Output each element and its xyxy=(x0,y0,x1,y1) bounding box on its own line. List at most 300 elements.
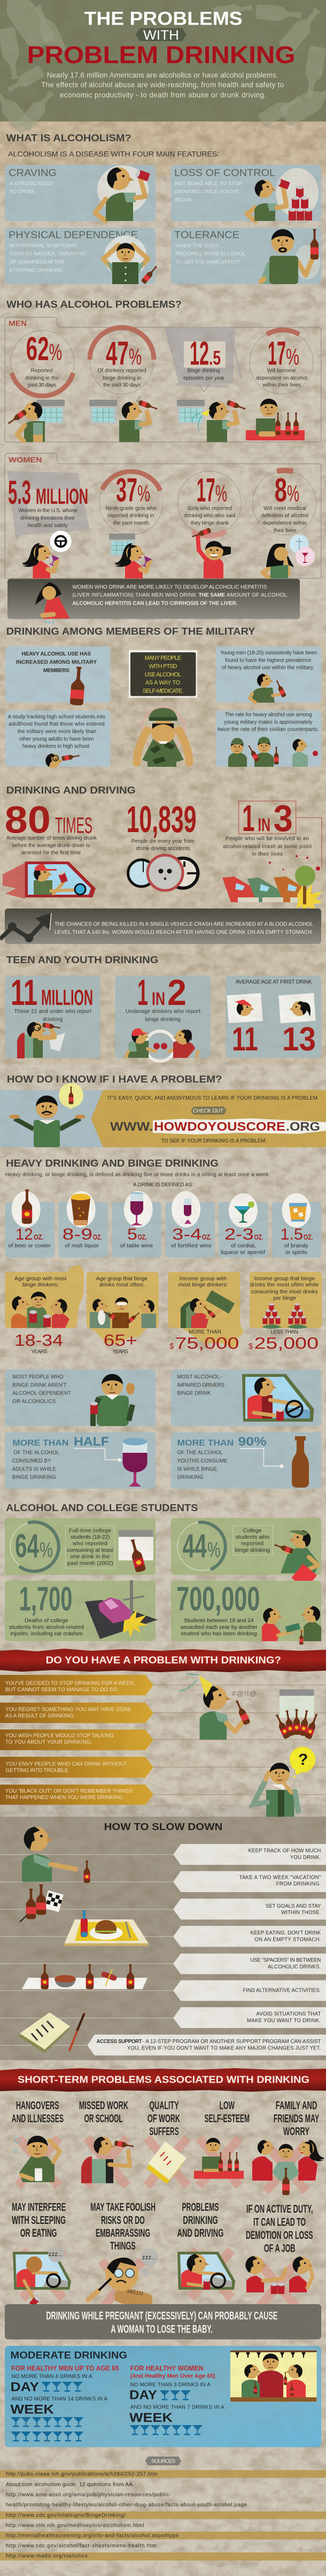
panel: more than 90% xyxy=(171,1432,321,1489)
sign 1: BUT CANNOT SEEM TO MANAGE TO DO SO. xyxy=(5,1687,119,1693)
icon: woman thinking of driving xyxy=(21,531,72,578)
stat: 17% girls: drinking who also said xyxy=(184,513,235,519)
stat: 37%: Ninth-grade girls who xyxy=(106,506,157,512)
icon: worried man xyxy=(253,1747,315,1817)
column: men: FOR HEALTHY MEN UP TO AGE 65 xyxy=(11,2365,119,2372)
column: men xyxy=(11,2365,119,2441)
panel: malt liquor xyxy=(58,1191,108,1257)
panel: loss of control: BEGUN xyxy=(175,197,191,203)
problem: interfere with sleeping: MAY INTERFERE xyxy=(12,2201,66,2213)
panel: physical dependence xyxy=(5,228,159,284)
callout: ptsd xyxy=(129,650,197,698)
text: AMOUNT OF ALCOHOL. xyxy=(227,592,289,598)
panel: 64% college xyxy=(5,1518,156,1575)
text: TO SEE IF YOUR DRINKING IS A PROBLEM. xyxy=(161,1138,267,1144)
icon: wine glass xyxy=(130,1192,143,1225)
panel: income binge most often: Income group that binge xyxy=(254,1276,315,1282)
panel: 700,000 assaulted: student who has been drinking xyxy=(181,1631,257,1637)
panel: 44% college: binge drinking xyxy=(235,1548,270,1553)
panel: not alcohol-dependent: OR ALCOHOLICS xyxy=(12,1399,56,1405)
subheading: four features: ALCOHOLISM IS A DISEASE WITH FOUR MAIN FEATURES: xyxy=(8,150,219,158)
column: women: DAY xyxy=(129,2388,157,2402)
stat: 5.3 million: health and safety xyxy=(28,523,68,529)
panel: young men: found to have the highest prevalence xyxy=(225,658,312,664)
definition text: Heavy drinking, or binge drinking, is defined as drinking five or more drinks in a sitting at least once a week. xyxy=(5,1172,270,1178)
panel: 64% college: who reported xyxy=(72,1541,107,1547)
panel: table wine: OZ. xyxy=(138,1233,147,1241)
stat: 80 times: before the average drunk driver is xyxy=(12,843,90,849)
panel: beer: 12 xyxy=(15,1226,33,1244)
problem: interfere with sleeping xyxy=(12,2201,71,2307)
panel: men: MEN xyxy=(9,319,27,327)
icon: pint glass xyxy=(71,1194,90,1225)
icon: martini xyxy=(234,1201,254,1223)
stat: 1 in 3: People who will be involved in an xyxy=(226,836,309,842)
panel: rate among males: The rate for heavy alcohol use among xyxy=(225,712,312,718)
panel: 700,000 assaulted xyxy=(171,1580,321,1645)
panel: age group most binge drinkers: 18-34 xyxy=(14,1331,63,1350)
icon: soldier covering ears xyxy=(137,707,189,767)
list: source links: http://pubs.niaaa.nih.gov/publications/arh284/252-257.htm xyxy=(6,2472,157,2478)
stat: 12.5 binge episodes xyxy=(165,326,242,392)
problem: family worry xyxy=(252,2099,325,2195)
panel: income binge most often: 25,000 xyxy=(254,1334,319,1353)
tip 4: ON AN EMPTY STOMACH. xyxy=(254,1937,321,1942)
stat: 5.3 million xyxy=(7,471,90,540)
column: men: AND NO MORE THAN 14 DRINKS IN A xyxy=(11,2396,107,2402)
banner: do you have a problem: DO YOU HAVE A PROBLEM WITH DRINKING? xyxy=(46,1654,281,1665)
panel: impaired drivers: IMPAIRED DRIVERS xyxy=(177,1382,224,1388)
icon: man with money xyxy=(181,1290,235,1328)
icon: rising arrow xyxy=(0,912,52,942)
banner: do you have a problem xyxy=(0,1649,326,1672)
icon: man refusing bottle xyxy=(22,1827,90,1883)
text: (LIVER INFLAMMATION) THAN MEN WHO DRINK xyxy=(72,592,197,598)
panel: more than half: HALF xyxy=(74,1435,109,1449)
stat: 1 in 3: in their lives xyxy=(252,851,283,857)
panel: tolerance: REQUIRES MORE ALCOHOL xyxy=(175,251,246,257)
column: women: NO MORE THAN 3 DRINKS IN A xyxy=(130,2382,211,2388)
panel: 1,700 deaths: Deaths of college xyxy=(25,1618,68,1624)
icon: man with calendar xyxy=(7,400,65,442)
icon: sweating man xyxy=(103,235,159,284)
panel: malt liquor: 8-9 xyxy=(63,1226,92,1244)
panel: income most binge drinkers xyxy=(168,1272,244,1353)
stat: 62%: 62 xyxy=(26,331,49,368)
stat: 1 in 3: 3 xyxy=(274,797,293,839)
panel: 64% college: consuming at least xyxy=(67,1548,113,1553)
stat: 62% xyxy=(11,331,74,396)
panel: craving: CRAVING xyxy=(9,167,57,178)
panel: spirits xyxy=(271,1193,321,1257)
panel: age group binge most often: 65+ xyxy=(104,1331,137,1350)
panel: income most binge drinkers: MORE THAN xyxy=(189,1329,221,1335)
panel: women xyxy=(5,453,321,578)
panel: more than half: OF THE ALCOHOL xyxy=(13,1450,60,1456)
problem: hangovers: AND ILLNESSES xyxy=(12,2113,64,2125)
panel: fortified wine xyxy=(165,1191,215,1257)
problem: drinking and driving: PROBLEMS xyxy=(182,2201,219,2213)
icon: girl head tile xyxy=(278,993,316,1023)
panel: spirits: OZ. xyxy=(304,1233,313,1241)
panel: young men: of heavy alcohol use within the military. xyxy=(222,665,314,671)
panel: tolerance: TO GET THE SAME EFFECT xyxy=(175,260,241,265)
list: source links: http://www.cdc.gov/alcohol/fact-sheets/mens-health.htm xyxy=(6,2543,157,2549)
panel: 700,000 assaulted: 700,000 xyxy=(176,1580,260,1618)
panel: not alcohol-dependent: ALCOHOL-DEPENDENT xyxy=(12,1391,71,1397)
stat: 10,839 xyxy=(127,798,198,890)
list: source links: http://www.nlm.nih.gov/medlineplus/alcoholism.html xyxy=(6,2522,144,2528)
panel: age group most binge drinkers: binge drinkers: xyxy=(22,1282,59,1288)
stat: 8%: definition of alcohol xyxy=(261,513,308,519)
stat: 80 times xyxy=(3,799,97,899)
problem: foolish risks: THINGS xyxy=(110,2240,136,2252)
chart: 44 ring: 44 xyxy=(183,1528,207,1565)
problem: low self-esteem xyxy=(194,2099,250,2186)
stat: 62%: past 30 days xyxy=(28,383,56,388)
problem: drinking and driving: DRINKING xyxy=(183,2214,218,2227)
panel: income most binge drinkers: $ xyxy=(169,1342,174,1351)
stat: 37%: 37 xyxy=(116,472,137,509)
tip 6: FIND ALTERNATIVE ACTIVITIES. xyxy=(243,1988,321,1994)
icon: woman raising bottle xyxy=(191,528,231,578)
panel: 44% college xyxy=(171,1518,321,1589)
icon: party man with bottle and calendar xyxy=(179,1674,320,1740)
panel: impaired drivers: BINGE DRINK xyxy=(177,1391,211,1397)
column: men: NO MORE THAN 4 DRINKS IN A xyxy=(11,2374,92,2380)
heading: drinking and driving: DRINKING AND DRIVING xyxy=(6,784,136,796)
panel: income most binge drinkers: most binge drinkers: xyxy=(178,1282,228,1288)
list: source links: http://mentalhealthscreening.org/info-and-facts/alcohol.aspx#type xyxy=(6,2533,178,2539)
tip 5: ALCOHOLIC DRINKS. xyxy=(268,1964,321,1970)
list: source links: http://www.cdc.gov/vitalsigns/BingeDrinking/ xyxy=(6,2512,126,2518)
panel: fortified wine: 3-4 xyxy=(172,1226,201,1244)
stat: 47%: % xyxy=(129,345,142,370)
problem: interfere with sleeping: WITH SLEEPING xyxy=(12,2214,66,2227)
icon: man drinking xyxy=(95,165,150,221)
panel: 1,700 deaths: injuries, including car crashes xyxy=(11,1631,82,1637)
title: THE PROBLEMS xyxy=(84,9,243,29)
icon: man with bottle xyxy=(259,229,320,284)
panel: 11 million: Those 21 and under who report xyxy=(14,1009,91,1015)
panel: average age: AVERAGE AGE AT FIRST DRINK xyxy=(236,979,312,985)
icon: shrugging man xyxy=(9,1083,86,1147)
problem: missed work xyxy=(79,2099,134,2186)
sign 1: YOU'VE DECIDED TO STOP DRINKING FOR A WEEK, xyxy=(5,1680,135,1686)
tip 2: TAKE A TWO WEEK "VACATION" xyxy=(239,1875,321,1881)
stat: 10,839: People die every year from xyxy=(131,839,195,844)
tip 4: KEEP EATING. DON'T DRINK xyxy=(250,1930,321,1936)
panel: 44% college: students who xyxy=(236,1534,269,1540)
problem: foolish risks: MAY TAKE FOOLISH xyxy=(90,2201,156,2213)
callout: ptsd: SELF-MEDICATE. xyxy=(143,688,183,695)
panel: more than half xyxy=(5,1432,156,1489)
panel: cordial: 2-3 xyxy=(224,1226,254,1244)
column: women: (And Healthy Men Over Age 65) xyxy=(130,2373,215,2379)
sign 1 xyxy=(0,1675,153,1695)
panel: 44% college: reported xyxy=(241,1541,263,1547)
icon: student drinking xyxy=(81,2137,134,2186)
stat: 17%: Will become xyxy=(267,368,296,374)
stat: 5.3 million: MILLION xyxy=(36,484,88,509)
icon: student with book xyxy=(274,1530,319,1589)
callout: pregnancy banner: A WOMAN TO LOSE THE BABY. xyxy=(111,2323,213,2335)
panel: 700,000 assaulted: Students between 18 and 24 xyxy=(184,1618,254,1624)
panel: cordial: liqueur or aperitif xyxy=(221,1249,265,1255)
tip 6 xyxy=(173,1980,326,2001)
stat: 17% girls: they binge drank xyxy=(191,521,229,527)
tip 8: access support: ACCESS SUPPORT xyxy=(96,2039,142,2045)
stat: 10,839: drunk driving accidents xyxy=(136,846,190,852)
stat: 62%: Reported xyxy=(31,368,52,374)
label: check out xyxy=(191,1107,227,1115)
tip 3 xyxy=(173,1899,326,1919)
sign 5 xyxy=(0,1785,153,1805)
sign 4 xyxy=(0,1757,153,1778)
stat: 47%: 47 xyxy=(106,336,129,372)
problem: active duty xyxy=(245,2203,313,2309)
panel: physical dependence: STOPPING DRINKING xyxy=(9,268,63,273)
panel: income binge most often xyxy=(249,1272,322,1353)
icon: sleeping driver: ZZZ... xyxy=(49,2252,63,2257)
panel: income binge most often: $ xyxy=(249,1342,253,1351)
stat: 17%: within their lives xyxy=(262,383,301,388)
list: source links: http://www.madd.org/statistics xyxy=(6,2553,88,2559)
stat: 12.5 binge episodes: Binge drinking xyxy=(187,368,220,374)
icon: driver with can xyxy=(177,2250,235,2298)
stat: 37%: the past month xyxy=(113,521,149,527)
stat: 1 in 3: 1 xyxy=(242,797,255,839)
intro text: economic productivity - to death from abuse or drunk driving. xyxy=(60,91,266,99)
panel: not alcohol-dependent xyxy=(5,1369,156,1426)
stat: 37% xyxy=(99,471,163,535)
panel: high school study: other young adults to have been xyxy=(19,736,94,742)
panel: more than 90%: OF THE ALCOHOL xyxy=(177,1450,223,1456)
problem: low self-esteem: LOW xyxy=(219,2099,235,2112)
text xyxy=(72,584,289,606)
panel: table wine: of table wine xyxy=(120,1243,153,1249)
heading: HOW TO SLOW DOWN xyxy=(104,1821,222,1832)
icon: family around drinker xyxy=(252,2140,325,2195)
tip 1 xyxy=(173,1844,326,1865)
panel: age group most binge drinkers: YEARS xyxy=(31,1349,48,1355)
sign 2: YOU REGRET SOMETHING YOU MAY HAVE DONE xyxy=(5,1706,131,1712)
icon: woman deciding xyxy=(263,535,315,578)
callout: ptsd: MANY PEOPLE xyxy=(145,655,181,661)
sign 3: TO YOU ABOUT YOUR DRINKING. xyxy=(5,1740,92,1746)
panel: impaired drivers: MOST ALCOHOL- xyxy=(177,1374,222,1380)
icon: can pyramids xyxy=(262,1303,308,1329)
stat: 8% xyxy=(252,470,316,535)
callout: ptsd: USE ALCOHOL xyxy=(145,672,181,678)
panel: average age: 11 xyxy=(232,1021,258,1058)
panel: tolerance: TOLERANCE xyxy=(174,229,239,240)
sign 4: GETTING INTO TROUBLE. xyxy=(5,1768,69,1774)
panel: income binge most often: per binge xyxy=(273,1295,296,1301)
panel: age group binge most often: Age group that binge xyxy=(96,1276,148,1282)
problem: interfere with sleeping: OR EATING xyxy=(20,2227,57,2239)
banner: short-term problems: SHORT-TERM PROBLEMS ASSOCIATED WITH DRINKING xyxy=(18,2074,309,2085)
panel: young men xyxy=(216,646,321,703)
panel: spirits: of brandy xyxy=(284,1243,308,1249)
panel: more than half: CONSUMED BY xyxy=(12,1458,51,1464)
panel: beer: of beer or cooler xyxy=(9,1243,51,1249)
panel: 64% college: one drink in the xyxy=(71,1554,110,1560)
title: WITH xyxy=(143,28,179,43)
panel: heavy alcohol use: HEAVY ALCOHOL USE HAS xyxy=(21,651,91,657)
tip 2 xyxy=(173,1871,326,1892)
stat: 17% girls xyxy=(177,471,242,536)
icon: man with cans xyxy=(247,168,319,221)
panel: malt liquor: OZ. xyxy=(93,1233,102,1241)
problem: low self-esteem: SELF-ESTEEM xyxy=(204,2113,250,2125)
list: source links: http://www.ama-assn.org/ama/pub/physician-resources/public- xyxy=(6,2492,171,2498)
intro text: The effects of alcohol abuse are wide-reaching, from health and safety to xyxy=(41,81,284,89)
stat: 12.5 binge episodes: episodes per year xyxy=(183,375,225,381)
icon: three older men xyxy=(90,1297,156,1328)
problem: quality of work: OF WORK xyxy=(148,2113,180,2125)
intro text xyxy=(41,71,284,99)
tip 4 xyxy=(173,1926,326,1947)
problem: drinking and driving: AND DRIVING xyxy=(177,2227,223,2239)
callout: hepatitis banner xyxy=(7,579,300,624)
callout: ptsd: WITH PTSD xyxy=(149,664,177,670)
icon: meal tray xyxy=(65,1910,149,1946)
panel: 64% college: Full-time college xyxy=(69,1528,111,1534)
icon: man drinking with calendar xyxy=(89,397,158,442)
panel: fortified wine: of fortified wine xyxy=(171,1243,212,1249)
problem: quality of work: SUFFERS xyxy=(149,2125,179,2138)
text: WOMEN WHO DRINK ARE MORE LIKELY TO DEVELOP ALCOHOLIC HEPATITIS xyxy=(72,584,267,590)
tip 1: YOU DRINK. xyxy=(290,1855,321,1861)
intro text: Nearly 17.6 million Americans are alcoholics or have alcohol problems. xyxy=(47,71,278,79)
problem: foolish risks: RISKS OR DO xyxy=(101,2214,145,2227)
stat: 80 times: TIMES xyxy=(55,813,92,838)
problem: drinking and driving xyxy=(177,2201,235,2298)
panel: men xyxy=(5,317,321,442)
tip 5 xyxy=(173,1954,326,1974)
panel: physical dependence: OR SHAKINESS AFTER xyxy=(9,260,64,265)
problem: hangovers xyxy=(12,2099,64,2186)
sign 3: YOU WISH PEOPLE WOULD STOP TALKING xyxy=(5,1733,114,1739)
icon: drawn-on sleeping face: HELLO xyxy=(127,2289,143,2296)
panel: young men: Young men (18-25) consistently have been xyxy=(220,650,317,656)
panel: rate among males: young military males is approximately xyxy=(224,720,312,726)
panel: rate among males: twice the rate of their civilian counterparts. xyxy=(218,727,319,733)
panel: not alcohol-dependent: MOST PEOPLE WHO xyxy=(12,1374,64,1380)
icon: calendar and bottle xyxy=(119,1530,153,1573)
subheading: a drink is defined as: A DRINK IS DEFINED AS: xyxy=(133,1182,193,1188)
stat: 80 times: Average number of times driving drunk xyxy=(6,835,97,841)
panel: 1 in 2 xyxy=(115,972,211,1061)
panel: moderate drinking: MODERATE DRINKING xyxy=(11,2349,127,2360)
icon: beer bottle xyxy=(22,1190,32,1224)
title xyxy=(27,9,296,68)
panel: 11 million: 11 xyxy=(11,972,37,1013)
list: source links: health/promoting-healthy-lifestyles/alcohol-other-drug-abuse/facts-about-youth-alcohol.page xyxy=(6,2502,247,2508)
icon: man at bar with bottles xyxy=(246,399,305,440)
icon: woman with calendar xyxy=(109,534,152,578)
stat: 1 in 3 xyxy=(222,797,323,913)
panel: 1 in 2: 2 xyxy=(167,972,187,1013)
heading: teen and youth: TEEN AND YOUTH DRINKING xyxy=(6,954,158,965)
stat: 10,839: 10,839 xyxy=(127,798,197,840)
chart: 44 ring: % xyxy=(207,1538,220,1562)
panel: 64% college: students (18-22) xyxy=(71,1534,110,1540)
stat: 17%: dependent on alcohol xyxy=(256,375,307,381)
panel: more than half: BINGE DRINKING xyxy=(12,1474,56,1480)
stat: 37%: % xyxy=(137,481,150,507)
problem: foolish risks: EMBARRASSING xyxy=(96,2227,150,2239)
stat: 17% girls: % xyxy=(215,481,227,507)
callout: ptsd: AS A WAY TO xyxy=(145,680,180,686)
panel: 1,700 deaths xyxy=(5,1580,158,1641)
column: women xyxy=(129,2365,224,2435)
stat: 1 in 3: alcohol-related crash at some point xyxy=(223,844,312,850)
stat: 12.5 binge episodes: 12 xyxy=(190,336,209,372)
panel: age group most binge drinkers xyxy=(5,1265,84,1355)
chart: 64 ring: % xyxy=(40,1538,53,1562)
panel: how to slow down xyxy=(0,1817,326,2060)
stat: 47%: binge drinking in xyxy=(103,375,141,381)
stat: 8%: 8 xyxy=(275,472,287,509)
sign 3 xyxy=(0,1729,153,1750)
icon: three young men xyxy=(11,1292,69,1328)
icon: people at bar xyxy=(230,2351,317,2402)
icon: failing papers xyxy=(146,2138,188,2186)
stat: 5.3 million: drinking threatens their xyxy=(20,515,75,521)
text: IT'S EASY, QUICK, AND ANONYMOUS TO LEARN IF YOUR DRINKING IS A PROBLEM. xyxy=(107,1095,319,1101)
panel: physical dependence: WITHDRAWAL SYMPTOMS, xyxy=(9,243,78,249)
stat: 62%: % xyxy=(49,340,62,365)
text xyxy=(55,921,314,935)
panel: age group binge most often xyxy=(87,1272,159,1355)
tip 5: USE "SPACERS" IN BETWEEN xyxy=(250,1957,321,1963)
stat: 62%: drinking in the xyxy=(25,375,59,381)
callout: blood alcohol banner xyxy=(0,909,321,944)
panel: more than 90%: IS WHILE BINGE xyxy=(177,1466,218,1472)
problem: active duty: OF A JOB xyxy=(264,2242,295,2254)
website url xyxy=(110,1118,326,1134)
chart: 44 ring xyxy=(177,1522,226,1571)
icon: car crash xyxy=(222,855,323,913)
stat: 17% girls: Girls who reported xyxy=(188,506,232,512)
panel: income binge most often: drinks the most often while xyxy=(250,1282,319,1288)
panel: loss of control: NOT BEING ABLE TO STOP xyxy=(175,181,242,187)
panel: cordial: of cordial, xyxy=(231,1243,256,1249)
panel: average age xyxy=(226,975,321,1058)
tip 3: SET GOALS AND STAY xyxy=(266,1903,321,1909)
panel: malt liquor: of malt liquor xyxy=(65,1243,99,1249)
website url: WWW. xyxy=(110,1119,153,1133)
sign 2 xyxy=(0,1703,153,1723)
panel: age group binge most often: YEARS xyxy=(112,1349,128,1355)
tip 2: FROM DRINKING. xyxy=(276,1881,321,1887)
panel: high school study xyxy=(5,711,111,768)
icon: large wine glass xyxy=(123,1438,148,1487)
list: warning signs xyxy=(0,1675,153,1805)
problem: family worry: WORRY xyxy=(283,2125,309,2138)
panel: more than half: ADULTS IS WHILE xyxy=(12,1466,56,1472)
list: source links: About.com alcoholism guide: 12 questions from AA xyxy=(6,2482,133,2488)
chart: 64 ring: 64 xyxy=(15,1528,39,1565)
panel: 44% college: College xyxy=(243,1528,262,1534)
tip 7: AVOID SITUATIONS THAT xyxy=(256,2011,321,2017)
panel: average age: 13 xyxy=(282,1021,316,1058)
panel: 11 million: drinking xyxy=(43,1017,63,1023)
tip 8: access support: - A 12-STEP PROGRAM OR ANOTHER SUPPORT PROGRAM CAN ASSIST xyxy=(143,2039,321,2045)
stat: 17% girls: 17 xyxy=(197,472,215,509)
